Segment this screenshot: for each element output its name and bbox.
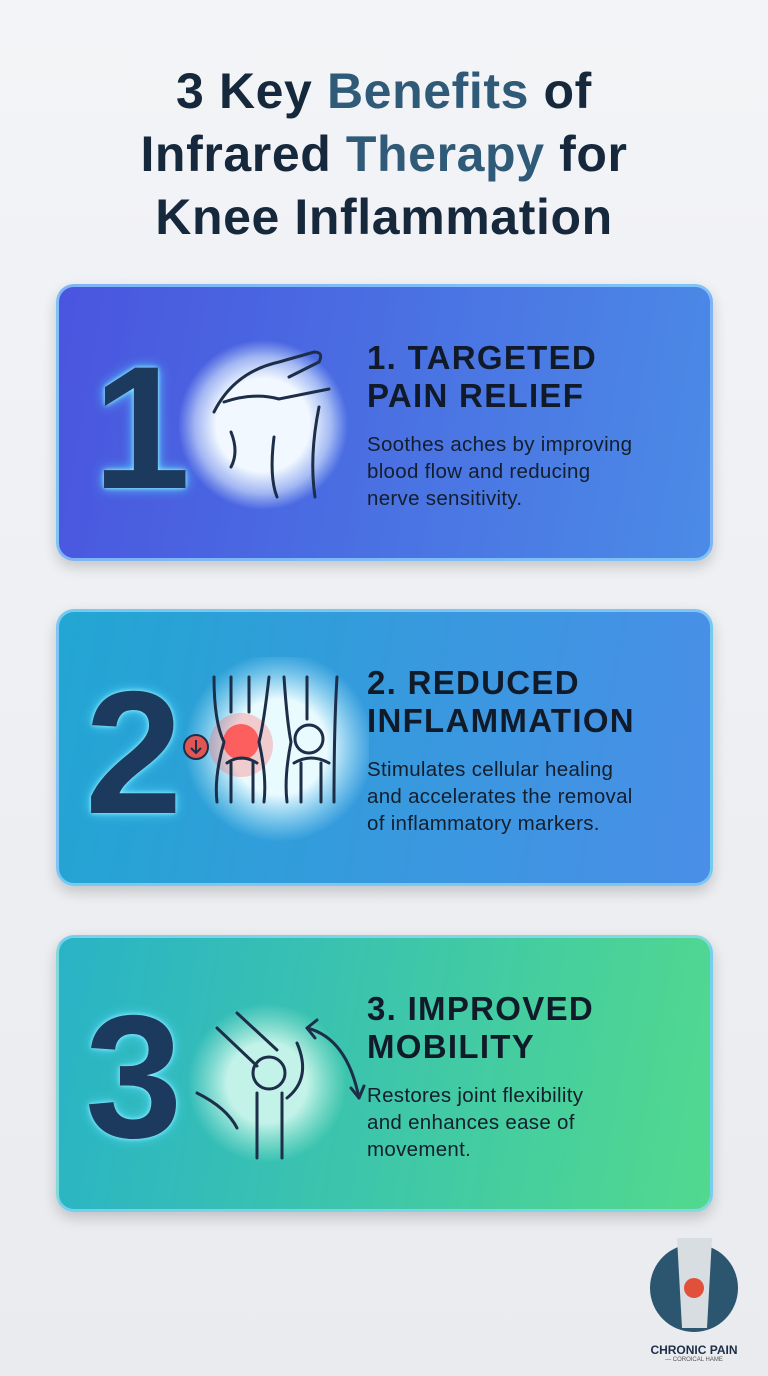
heading: [367, 664, 635, 739]
heading: MOBILITY: [367, 1028, 535, 1065]
description: [367, 1084, 583, 1161]
heading: [367, 990, 594, 1065]
title: 3 Key Benefits of: [176, 63, 592, 119]
icon: bending knee with arrow: [190, 1006, 366, 1160]
number 1: 1: [93, 331, 190, 526]
panel: improved mobility: [56, 935, 713, 1212]
title: Infrared Therapy for: [140, 126, 628, 182]
icon: inflamed knee joints: [183, 657, 369, 840]
description: movement.: [367, 1138, 471, 1161]
heading: 3. IMPROVED: [367, 990, 594, 1027]
heading: [367, 339, 597, 414]
description: [367, 758, 633, 835]
description: nerve sensitivity.: [367, 487, 522, 510]
description: of inflammatory markers.: [367, 812, 600, 835]
logo: chronic pain: — COROICAL HAME: [665, 1357, 723, 1363]
heading: 2. REDUCED: [367, 664, 580, 701]
description: [367, 433, 632, 510]
description: Soothes aches by improving: [367, 433, 632, 456]
description: Stimulates cellular healing: [367, 758, 613, 781]
description: and enhances ease of: [367, 1111, 575, 1134]
panel: targeted pain relief: [56, 284, 713, 561]
description: Restores joint flexibility: [367, 1084, 583, 1107]
title: Knee Inflammation: [155, 189, 613, 245]
heading: INFLAMMATION: [367, 702, 635, 739]
description: blood flow and reducing: [367, 460, 590, 483]
number 3: 3: [85, 980, 182, 1175]
title: [140, 63, 628, 245]
logo: chronic pain: CHRONIC PAIN: [650, 1343, 738, 1357]
number 2: 2: [85, 656, 182, 851]
panel: reduced inflammation: [56, 609, 713, 886]
logo: chronic pain: [650, 1238, 738, 1363]
heading: 1. TARGETED: [367, 339, 597, 376]
heading: PAIN RELIEF: [367, 377, 584, 414]
description: and accelerates the removal: [367, 785, 633, 808]
icon: hand on knee: [180, 342, 346, 508]
